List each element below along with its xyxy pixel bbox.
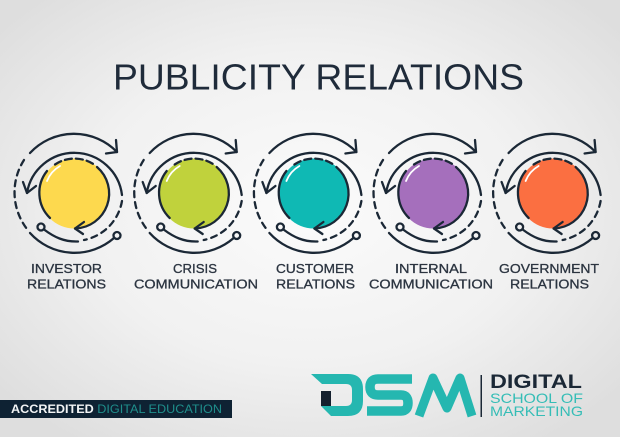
icon: investor relations cycle — [15, 134, 122, 253]
logo wordmark: DIGITAL — [490, 372, 582, 393]
logo wordmark — [490, 372, 583, 419]
label: government relations: RELATIONS — [510, 276, 589, 292]
logo: DSM — [311, 374, 472, 416]
label: customer relations: CUSTOMER — [276, 261, 354, 276]
icon: crisis communication cycle — [134, 134, 242, 253]
label: investor relations: INVESTOR — [31, 261, 102, 276]
logo wordmark: SCHOOL OF — [490, 390, 583, 406]
logo wordmark: MARKETING — [490, 403, 583, 419]
logo letter M — [419, 378, 472, 416]
label: government relations — [499, 261, 599, 292]
label: internal communication: COMMUNICATION — [369, 276, 493, 292]
label: customer relations — [276, 261, 355, 292]
icon: customer relations cycle — [254, 134, 361, 253]
label: crisis communication — [134, 261, 258, 292]
label: investor relations: RELATIONS — [27, 276, 106, 292]
label: crisis communication: COMMUNICATION — [134, 276, 258, 292]
icon: government relations cycle — [493, 134, 601, 253]
label: government relations: GOVERNMENT — [499, 261, 599, 276]
accreditation banner: ACCREDITED DIGITAL EDUCATION — [11, 404, 222, 416]
logo divider — [480, 375, 482, 417]
icon: internal communication cycle — [374, 134, 481, 253]
label: customer relations: RELATIONS — [276, 276, 355, 292]
logo letter D — [311, 374, 363, 416]
logo square — [321, 391, 331, 406]
label: internal communication — [369, 261, 493, 292]
title: PUBLICITY RELATIONS — [113, 56, 524, 98]
label: crisis communication: CRISIS — [173, 261, 217, 276]
accreditation banner — [0, 400, 232, 418]
logo letter S — [367, 379, 412, 411]
label: internal communication: INTERNAL — [395, 261, 467, 276]
label: investor relations — [27, 261, 106, 292]
